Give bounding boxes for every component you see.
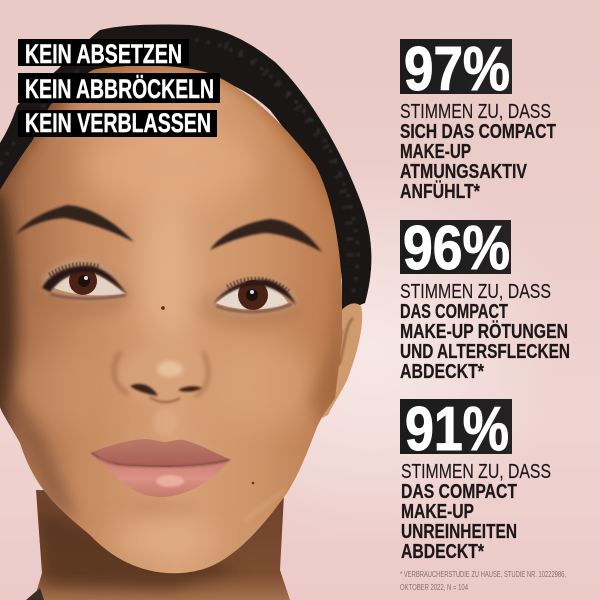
description: 97%: ANFÜHLT*: [400, 180, 480, 203]
left eyebrow: [16, 205, 134, 242]
left eye: [42, 256, 130, 301]
badge: 96%: 96%: [403, 214, 510, 283]
bar: kein verblassen: KEIN VERBLASSEN: [25, 108, 211, 138]
description: 97%: [400, 101, 556, 203]
mole beside nose: [161, 306, 165, 310]
stat block: 96 percent: [400, 214, 570, 383]
footnote: OKTOBER 2022, N = 104: [400, 583, 468, 592]
footnote: [400, 570, 566, 592]
shoulder shadow: [26, 588, 44, 600]
description: 91%: MAKE-UP: [401, 501, 474, 523]
ear inner detail: [338, 318, 353, 364]
bar: kein absetzen: KEIN ABSETZEN: [25, 39, 182, 69]
description: 96%: STIMMEN ZU, DASS: [400, 281, 551, 303]
description: 97%: STIMMEN ZU, DASS: [400, 101, 551, 123]
nose: [114, 342, 208, 436]
badge: 91%: 91%: [405, 395, 509, 464]
description: 96%: ABDECKT*: [400, 361, 484, 383]
description: 91%: DAS COMPACT: [401, 481, 517, 503]
description: 97%: ATMUNGSAKTIV: [400, 161, 528, 183]
description: 96%: [400, 281, 570, 383]
shading: [0, 190, 16, 450]
description: 96%: DAS COMPACT: [400, 301, 508, 323]
description: 91%: STIMMEN ZU, DASS: [401, 461, 551, 483]
headline: [18, 39, 220, 138]
lips: [90, 439, 231, 497]
description: 91%: UNREINHEITEN: [401, 521, 517, 543]
mole on chin: [252, 482, 254, 484]
stat block: 97 percent: [400, 35, 556, 203]
ear: [318, 303, 362, 420]
description: 91%: ABDECKT*: [401, 541, 484, 563]
badge: 97%: 97%: [404, 35, 510, 104]
stat block: 91 percent: [400, 395, 551, 563]
portrait photo: [0, 25, 371, 600]
description: 91%: [401, 461, 551, 563]
right eyebrow: [210, 219, 322, 252]
face skin: [0, 60, 365, 580]
right eye: [208, 277, 298, 315]
description: 97%: MAKE-UP: [400, 141, 471, 163]
neck: [30, 490, 292, 600]
bar: kein abbröckeln: KEIN ABBRÖCKELN: [25, 74, 214, 104]
description: 97%: SICH DAS COMPACT: [400, 121, 556, 143]
hair braid: [0, 25, 371, 312]
